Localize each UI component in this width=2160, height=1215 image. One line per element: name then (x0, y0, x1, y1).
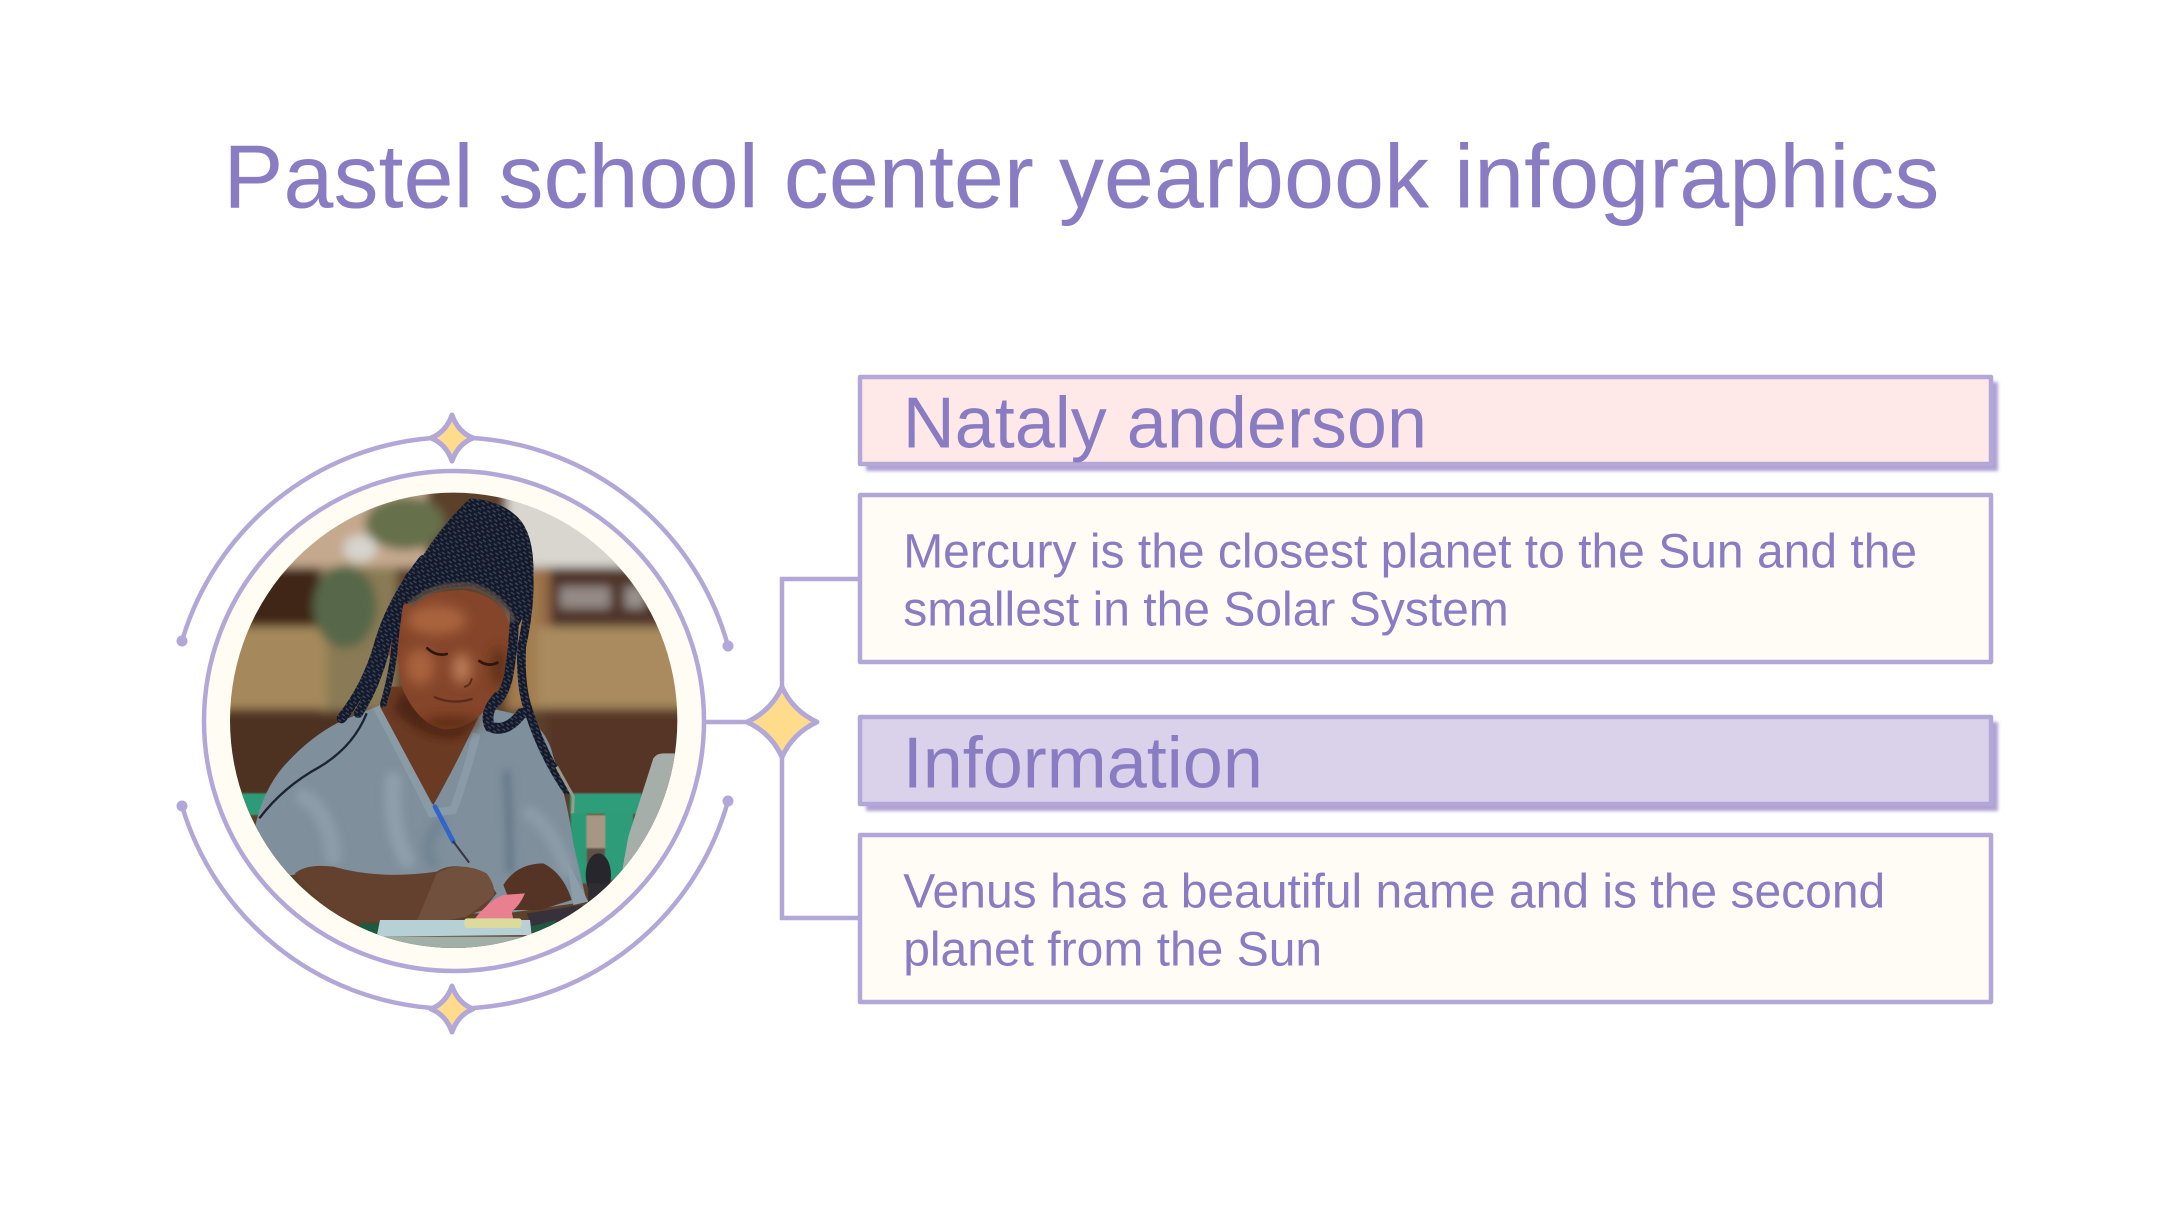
connector from portrait to boxes (705, 579, 860, 918)
pen (435, 807, 469, 862)
arc end dots (176, 636, 734, 812)
photo: student writing (230, 492, 678, 948)
shirt (255, 707, 587, 913)
outer arc: bottom right (473, 801, 728, 1008)
face (396, 590, 510, 729)
panel: name heading (860, 377, 1998, 471)
outer arc: top left (182, 438, 432, 641)
sleeve cuff (569, 872, 588, 905)
neck (380, 687, 478, 804)
portrait ring (204, 471, 704, 971)
panel: name description: smallest in the Solar System (903, 584, 1509, 637)
title: Pastel school center yearbook infographics (223, 128, 1939, 228)
table dark (360, 920, 556, 936)
panel: name description (860, 495, 1991, 662)
sticky notes (464, 893, 525, 928)
outer arc: bottom left (182, 806, 432, 1008)
neck shadow (393, 693, 480, 738)
panel: information heading (860, 717, 1998, 811)
writing hand (417, 867, 494, 922)
loose braid (259, 713, 367, 818)
ear (388, 640, 392, 656)
panel: information description (860, 835, 1991, 1002)
hair top (402, 498, 533, 627)
panel: name heading: Nataly anderson (903, 384, 1427, 464)
face highlights (405, 605, 506, 730)
icon: top star (431, 415, 473, 461)
laptop (622, 753, 677, 873)
laptop base (526, 905, 582, 928)
panel: information description: planet from the Sun (903, 924, 1322, 977)
bench (240, 793, 642, 885)
camera lens (586, 853, 611, 903)
collar (377, 707, 477, 813)
forearm (295, 866, 497, 918)
outer arc: top right (473, 438, 728, 646)
loose braid tip (557, 767, 573, 813)
icon: bottom star (431, 986, 473, 1032)
panel: information description: Venus has a beautiful name and is the second (903, 866, 1885, 919)
photo background (230, 492, 678, 948)
panel: name description: Mercury is the closest planet to the Sun and the (903, 526, 1917, 579)
right braids (488, 543, 567, 790)
notebook (377, 920, 532, 950)
right hand (503, 863, 572, 910)
icon: center star (747, 687, 817, 757)
hairline (410, 585, 513, 622)
panel: information heading: Information (903, 724, 1263, 804)
eyes and mouth (427, 648, 497, 702)
portrait medallion (176, 415, 734, 1032)
shirt folds (303, 773, 567, 870)
left braids (342, 560, 423, 718)
